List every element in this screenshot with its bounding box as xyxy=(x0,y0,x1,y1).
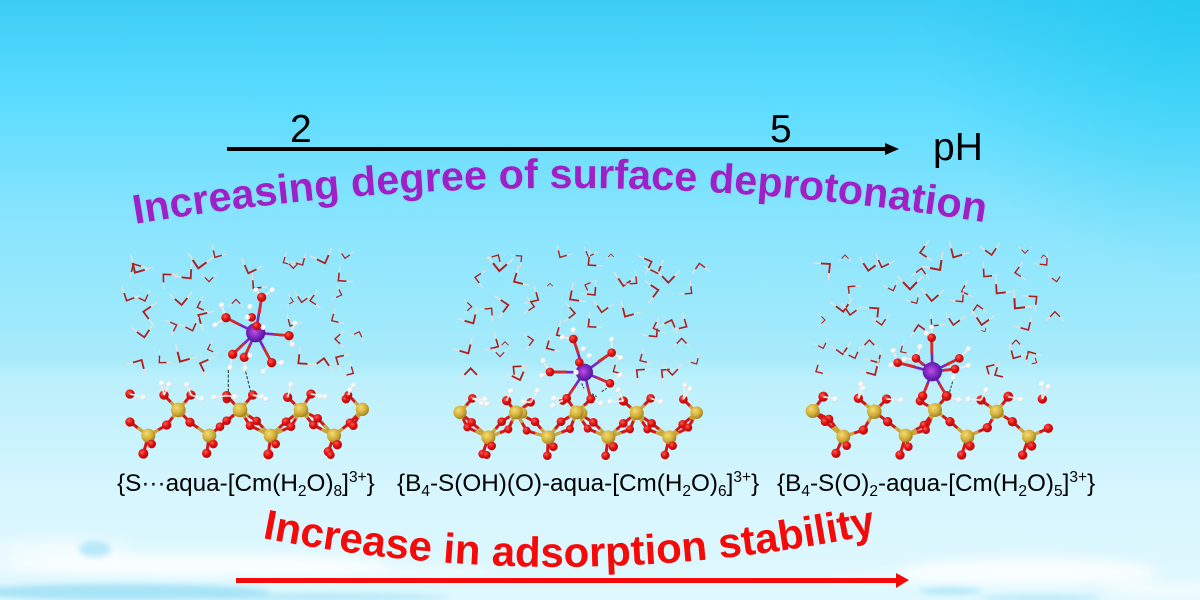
label: S aqua Cm(H2O)8: 2 xyxy=(298,483,307,500)
label: B4-S(O)2 aqua Cm(H2O)5: 3+ xyxy=(1069,469,1087,486)
surface hydroxyl hydrogens xyxy=(823,381,1051,403)
curium coordination shell xyxy=(888,325,971,401)
label: B4-S(O)2 aqua Cm(H2O)5: 2 xyxy=(869,483,878,500)
hydrogen bonds xyxy=(582,383,607,397)
label: B4-S(O)2 aqua Cm(H2O)5: } xyxy=(1087,470,1095,497)
slab bonds xyxy=(132,396,360,450)
label: B4-S(O)2 aqua Cm(H2O)5: 2 xyxy=(1018,483,1027,500)
panel: B4-S(OH)(O) aqua Cm(H2O)6 structure xyxy=(452,245,710,460)
label: B4-S(OH)(O) aqua Cm(H2O)6: O) xyxy=(691,470,718,497)
label: S aqua Cm(H2O)8: {S···aqua-[Cm(H xyxy=(117,470,298,497)
pH value 2: 2 xyxy=(290,108,312,151)
curium coordination shell xyxy=(539,327,623,403)
heading: increase in adsorption stability: Increase in adsorption stability xyxy=(264,510,872,575)
gold sulfur atoms xyxy=(453,405,703,444)
red oxygen atoms xyxy=(818,391,1053,460)
pH value 5: 5 xyxy=(770,108,792,151)
label: B4-S(OH)(O) aqua Cm(H2O)6: {B xyxy=(397,470,421,497)
heading: increasing degree of surface deprotonation: Increasing degree of surface deprotonation xyxy=(133,158,985,224)
label: S aqua Cm(H2O)8: O) xyxy=(307,470,334,497)
label: B4-S(O)2 aqua Cm(H2O)5: O) xyxy=(1027,470,1054,497)
label: B4-S(OH)(O) aqua Cm(H2O)6: ] xyxy=(727,470,733,497)
hydrogen bonds xyxy=(228,370,251,392)
label: B4-S(OH)(O) aqua Cm(H2O)6: 2 xyxy=(682,483,691,500)
label: B4-S(OH)(O) aqua Cm(H2O)6: 3+ xyxy=(733,469,751,486)
red oxygen atoms xyxy=(125,389,358,459)
label: B4-S(O)2 aqua Cm(H2O)5: 4 xyxy=(801,483,810,500)
label: B4-S(O)2 aqua Cm(H2O)5: -aqua-[Cm(H xyxy=(878,470,1018,497)
label: S aqua Cm(H2O)8: } xyxy=(367,470,375,497)
solvent water molecules xyxy=(452,245,710,385)
label: B4-S(O)2 aqua Cm(H2O)5: {B xyxy=(777,470,801,497)
label: S aqua Cm(H2O)8: 3+ xyxy=(349,469,367,486)
surface hydroxyl hydrogens xyxy=(130,381,356,402)
curium coordination shell xyxy=(212,287,298,374)
solvent water molecules xyxy=(812,241,1064,384)
hydrogen bond xyxy=(949,382,953,393)
panel: S aqua Cm(H2O)8 structure xyxy=(117,245,369,459)
solvent water molecules xyxy=(117,245,366,381)
pH axis arrow xyxy=(227,143,899,155)
slab bonds xyxy=(816,398,1045,452)
gold sulfur atoms xyxy=(141,403,369,443)
label: B4-S(O)2 aqua Cm(H2O)5: ] xyxy=(1063,470,1069,497)
pH axis label: pH xyxy=(933,126,983,169)
label: B4-S(O)2 aqua Cm(H2O)5: 5 xyxy=(1054,483,1063,500)
label: B4-S(OH)(O) aqua Cm(H2O)6: 4 xyxy=(421,483,430,500)
label: S aqua Cm(H2O)8: 8 xyxy=(334,483,342,500)
label: B4-S(OH)(O) aqua Cm(H2O)6: } xyxy=(751,470,759,497)
surface hydroxyl hydrogens xyxy=(472,382,693,408)
label: B4-S(OH)(O) aqua Cm(H2O)6: -S(OH)(O)-aqua-[Cm(H xyxy=(430,470,682,497)
slab bonds xyxy=(461,400,696,452)
gold sulfur atoms xyxy=(806,403,1036,444)
label: B4-S(OH)(O) aqua Cm(H2O)6: 6 xyxy=(718,483,727,500)
label: B4-S(O)2 aqua Cm(H2O)5: -S(O) xyxy=(810,470,869,497)
red oxygen atoms xyxy=(463,394,692,460)
panel: B4-S(O)2 aqua Cm(H2O)5 structure xyxy=(806,241,1064,460)
label: S aqua Cm(H2O)8: ] xyxy=(342,470,349,497)
stability arrow xyxy=(236,573,909,588)
